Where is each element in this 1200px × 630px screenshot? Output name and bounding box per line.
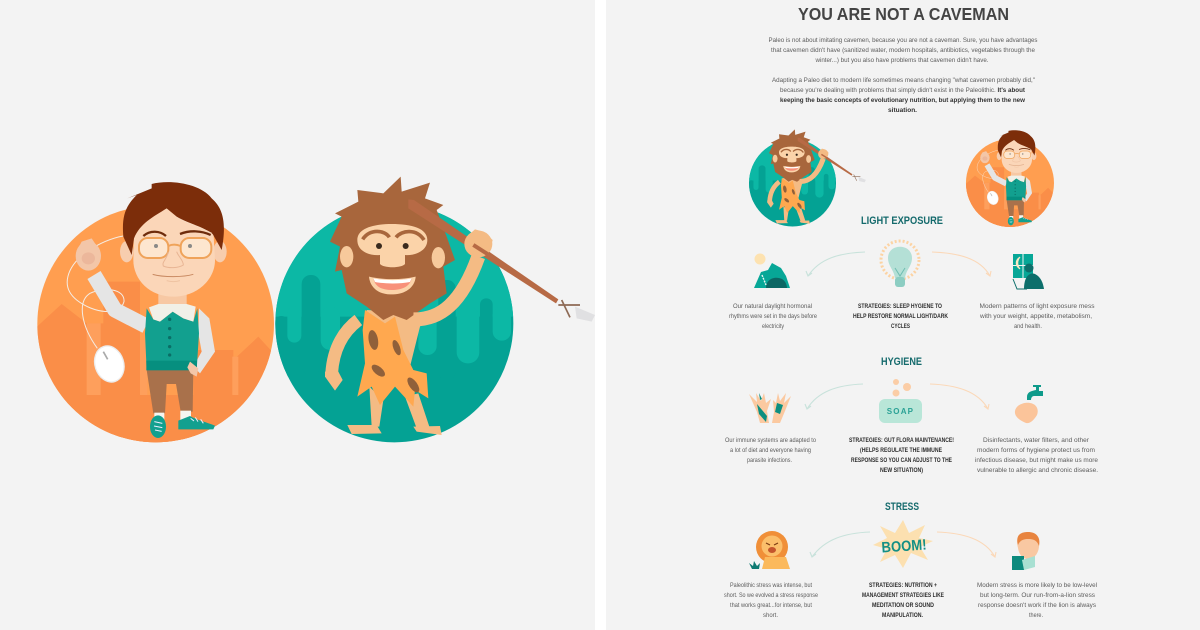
section: light exposure [729, 215, 1094, 330]
text: modern stress: response doesn't work if the lion is always [978, 602, 1096, 609]
text: paleolithic hygiene: Our immune systems are adapted to [725, 437, 816, 444]
arrow: to paleolithic [805, 384, 863, 409]
icon: dirty hands [749, 393, 791, 423]
text: paleolithic stress: short. So we evolved a stress response [724, 592, 818, 599]
text: stress strategies: STRATEGIES: NUTRITION + [869, 582, 937, 589]
text: paleolithic light: rhythms were set in the days before [729, 313, 817, 320]
title: YOU ARE NOT A CAVEMAN [798, 4, 1009, 24]
intro paragraph one [768, 37, 1038, 64]
icon: boom burst [873, 520, 933, 568]
section: hygiene [725, 356, 1098, 474]
text: modern stress: Modern stress is more likely to be low-level [977, 582, 1097, 589]
text: hygiene strategies: NEW SITUATION) [880, 467, 923, 474]
intro paragraph one: that cavemen didn't have (sanitized water, modern hospitals, antibiotics, vegetables through the [771, 47, 1035, 54]
icon: lion [749, 531, 790, 569]
intro paragraph two: because you're dealing with problems that simply didn't exist in the Paleolithic. It's about [780, 87, 1026, 94]
icon: night window and laptop user [1013, 254, 1044, 289]
text: paleolithic stress: Paleolithic stress was intense, but [730, 582, 812, 589]
text: light strategies: STRATEGIES: SLEEP HYGIENE TO [858, 303, 942, 310]
small modern man portrait [964, 130, 1056, 229]
icon: sun and cave [754, 254, 790, 288]
icon: soap: SOAP [887, 407, 914, 416]
text: modern stress [977, 582, 1097, 619]
arrow: to paleolithic [806, 252, 865, 276]
text: stress strategies [862, 582, 944, 619]
small caveman portrait [747, 129, 866, 226]
text: paleolithic hygiene [725, 437, 816, 464]
arrow: to paleolithic [810, 532, 870, 557]
section: stress [724, 501, 1097, 619]
text: modern hygiene: vulnerable to allergic and chronic disease. [977, 467, 1098, 474]
intro paragraph one: Paleo is not about imitating cavemen, because you are not a caveman. Sure, you have advantages [768, 37, 1038, 44]
text: paleolithic stress: that works great...for intense, but [730, 602, 812, 609]
text: stress strategies: MANIPULATION. [882, 612, 923, 619]
text: light strategies: HELP RESTORE NORMAL LIGHT/DARK [853, 313, 948, 320]
text: stress strategies: MEDITATION OR SOUND [872, 602, 934, 609]
illustration: caveman with spear [270, 177, 595, 442]
text: paleolithic hygiene: a lot of diet and everyone having [730, 447, 811, 454]
heading: hygiene: HYGIENE [881, 356, 922, 368]
text: hygiene strategies [849, 437, 954, 474]
text: modern hygiene: infectious disease, but might make us more [975, 457, 1098, 464]
text: modern light: and health. [1014, 323, 1042, 330]
icon: light bulb [881, 241, 919, 287]
text: light strategies [853, 303, 948, 330]
text: hygiene strategies: RESPONSE SO YOU CAN ADJUST TO THE [851, 457, 952, 464]
arrow: to modern [930, 384, 989, 409]
text: hygiene strategies: (HELPS REGULATE THE IMMUNE [860, 447, 942, 454]
text: modern light [979, 303, 1094, 330]
text: modern stress: but long-term. Our run-from-a-lion stress [980, 592, 1095, 599]
text: modern light: Modern patterns of light exposure mess [980, 303, 1094, 310]
text: paleolithic hygiene: parasite infections. [747, 457, 792, 464]
text: modern hygiene: modern forms of hygiene protect us from [977, 447, 1095, 454]
text: paleolithic stress [724, 582, 818, 619]
arrow: to modern [937, 532, 996, 557]
intro paragraph two: situation. [888, 107, 917, 114]
text: modern light: with your weight, appetite, metabolism, [979, 313, 1092, 320]
text: paleolithic light: Our natural daylight hormonal [733, 303, 812, 310]
text: paleolithic light: electricity [762, 323, 785, 330]
text: modern hygiene: Disinfectants, water filters, and other [983, 437, 1089, 444]
text: stress strategies: MANAGEMENT STRATEGIES LIKE [862, 592, 944, 599]
text: modern hygiene [975, 437, 1098, 474]
heading: light exposure: LIGHT EXPOSURE [861, 215, 943, 227]
intro paragraph two: Adapting a Paleo diet to modern life sometimes means changing "what cavemen probably did," [772, 77, 1035, 84]
text: modern stress: there. [1029, 612, 1043, 619]
text: paleolithic stress: short. [763, 612, 778, 619]
intro paragraph two [772, 77, 1035, 114]
heading: stress: STRESS [885, 501, 919, 513]
text: light strategies: CYCLES [891, 323, 910, 330]
icon: boom burst: BOOM! [881, 536, 927, 557]
icon: stressed modern man [1012, 532, 1039, 570]
icon: soap [879, 379, 922, 423]
text: hygiene strategies: STRATEGIES: GUT FLORA MAINTENANCE! [849, 437, 954, 444]
arrow: to modern [932, 252, 991, 276]
illustration: modern man with computer mouse [33, 182, 280, 448]
icon: tap and washing hands [1015, 385, 1043, 423]
text: paleolithic light [729, 303, 817, 330]
intro paragraph one: winter...) but you also have problems that cavemen didn't have. [815, 57, 989, 64]
intro paragraph two: keeping the basic concepts of evolutionary nutrition, but applying them to the new [780, 97, 1025, 104]
